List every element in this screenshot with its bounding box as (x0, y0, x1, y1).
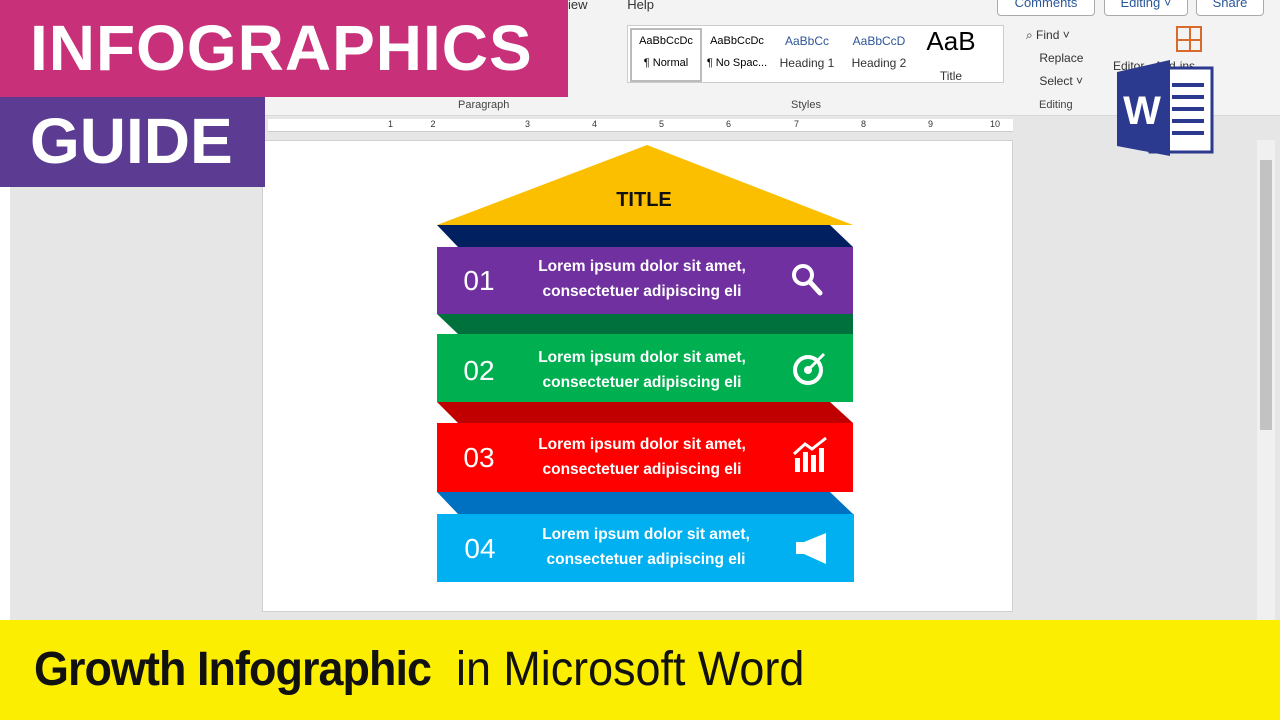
icon: word logo (1117, 60, 1212, 156)
banner: infographics: INFOGRAPHICS (30, 12, 533, 84)
banner: guide (0, 97, 265, 187)
ruler: 5 (659, 119, 664, 129)
ruler: 6 (726, 119, 731, 129)
styles gallery: ¶ No Spac... (707, 57, 767, 69)
ruler: 3 (525, 119, 530, 129)
bottom caption: Growth Infographic in Microsoft Word (34, 643, 804, 696)
icon: word logo: W (1123, 89, 1161, 133)
ribbon: Editing (1039, 99, 1073, 111)
step 01: consectetuer adipiscing eli (543, 283, 741, 300)
step 02: consectetuer adipiscing eli (543, 374, 741, 391)
ribbon (0, 0, 1280, 116)
editing group: Select ˅ (1039, 74, 1083, 88)
styles gallery: Heading 1 (780, 56, 834, 70)
styles gallery: AaBbCcDc (639, 35, 693, 47)
banner: infographics (0, 0, 568, 97)
step 04: consectetuer adipiscing eli (547, 551, 745, 568)
ruler: 9 (928, 119, 933, 129)
step 01: 01 (463, 265, 495, 296)
ruler: 8 (861, 119, 866, 129)
title roof: TITLE (616, 189, 672, 211)
styles gallery: AaB (926, 26, 976, 56)
icon: growth chart (794, 438, 826, 472)
step 02 (437, 314, 853, 402)
styles gallery: Title (940, 69, 962, 83)
title roof (437, 145, 853, 225)
ruler: 4 (592, 119, 597, 129)
step 04: 04 (464, 533, 496, 564)
icon: target (795, 354, 824, 383)
scrollbar (1257, 140, 1275, 620)
editing group (1026, 28, 1083, 88)
ribbon buttons (997, 0, 1095, 16)
styles gallery: ¶ Normal (644, 57, 688, 69)
styles gallery: AaBbCc (785, 34, 829, 48)
icon: magnifier (794, 266, 820, 293)
ruler (268, 119, 1013, 132)
step 04 (437, 492, 854, 582)
styles gallery (627, 25, 1004, 83)
bottom caption (0, 620, 1280, 720)
ruler: 10 (990, 119, 1000, 129)
step 01: Lorem ipsum dolor sit amet, (538, 258, 746, 275)
editing group: ⌕ Find ˅ (1026, 28, 1070, 42)
group labels: Paragraph (458, 99, 509, 111)
ribbon: Styles (791, 99, 821, 111)
styles gallery: AaBbCcDc (710, 35, 764, 47)
ribbon: Editor Add-ins (1113, 59, 1195, 73)
document page (262, 140, 1013, 612)
styles gallery: AaBbCcD (853, 34, 905, 48)
banner: guide: GUIDE (30, 105, 233, 177)
step 02: 02 (463, 355, 495, 386)
vertical ruler (0, 187, 10, 620)
step 02: Lorem ipsum dolor sit amet, (538, 349, 746, 366)
ruler: 7 (794, 119, 799, 129)
ruler: 1 2 (388, 119, 436, 129)
editing group: Replace (1039, 51, 1083, 65)
step 03: consectetuer adipiscing eli (543, 461, 741, 478)
step 03: 03 (463, 442, 495, 473)
step 01 (437, 225, 853, 314)
styles gallery: Heading 2 (852, 56, 906, 70)
step 03 (437, 402, 853, 492)
icon: megaphone (796, 533, 826, 564)
step 04: Lorem ipsum dolor sit amet, (542, 526, 750, 543)
add-ins icon (1176, 26, 1202, 52)
step 03: Lorem ipsum dolor sit amet, (538, 436, 746, 453)
